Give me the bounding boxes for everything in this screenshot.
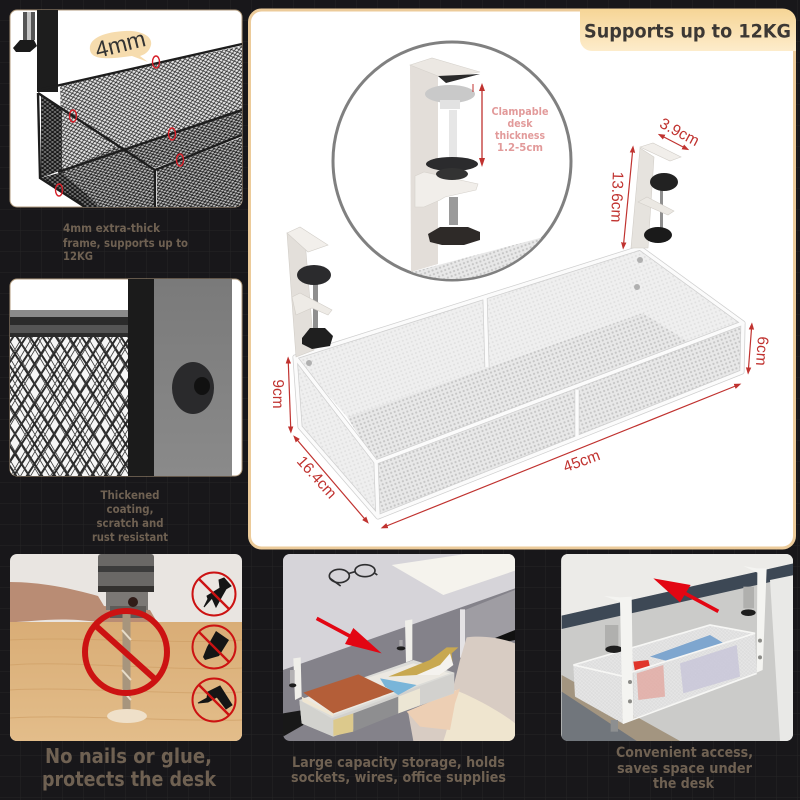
label: clampable desk thickness: thickness xyxy=(495,129,545,142)
caption: storage xyxy=(291,755,506,786)
notebook xyxy=(302,697,333,717)
caption: access: Convenient access, xyxy=(616,745,753,761)
dimension: 13.6cm: 13.6cm xyxy=(607,171,626,223)
callout: 4mm bubble: 4mm xyxy=(92,25,148,63)
dimension: 45cm xyxy=(384,385,738,527)
panel: 4mm frame photo xyxy=(10,10,242,207)
caption: access: the desk xyxy=(653,776,714,792)
dimension: 45cm: 45cm xyxy=(561,447,603,476)
gold bird ornament xyxy=(388,647,458,677)
caption: no nails: No nails or glue, xyxy=(45,744,212,768)
panel: coating close-up photo xyxy=(10,279,242,476)
panel: main product with dimensions xyxy=(250,10,794,548)
caption: 4mm frame: 4mm extra-thick xyxy=(63,221,160,235)
icon: no pushpin xyxy=(192,572,236,616)
dimension: 16.4cm xyxy=(293,438,366,521)
caption: coating xyxy=(92,488,168,544)
dimension: 3.9cm: 3.9cm xyxy=(657,115,702,150)
panel: desk access photo xyxy=(561,553,794,741)
caption: coating: scratch and xyxy=(96,516,164,530)
seated person xyxy=(408,637,515,741)
caption: 4mm frame: 12KG xyxy=(63,249,93,263)
panel: storage in use photo xyxy=(283,553,515,741)
caption: 4mm frame xyxy=(63,221,188,263)
clamps xyxy=(605,625,618,648)
caption: no nails: protects the desk xyxy=(42,767,217,791)
caption: coating: coating, xyxy=(106,502,154,516)
caption: storage: sockets, wires, office supplies xyxy=(291,770,506,786)
caption: no nails xyxy=(42,744,217,791)
label: clampable desk thickness: desk xyxy=(508,117,533,130)
icon: screw xyxy=(172,362,214,414)
product: left clamp xyxy=(287,227,333,357)
badge: load capacity xyxy=(580,9,796,51)
glasses xyxy=(329,565,377,586)
arrow: red pointer xyxy=(316,616,350,638)
dimension: 13.6cm xyxy=(607,149,633,246)
panel: no drilling photo xyxy=(10,554,242,741)
dimension: 16.4cm: 16.4cm xyxy=(293,453,340,502)
paper on desk xyxy=(392,553,515,595)
basket xyxy=(299,660,454,737)
caption: storage: Large capacity storage, holds xyxy=(292,755,505,771)
caption: access xyxy=(616,745,753,792)
dimension: 9cm: 9cm xyxy=(269,379,286,409)
inset: clamp detail circle xyxy=(333,42,580,290)
caption: coating: Thickened xyxy=(100,488,160,502)
basket xyxy=(573,625,753,676)
caption: 4mm frame: frame, supports up to xyxy=(63,236,188,250)
label: clampable desk thickness: 1.2-5cm xyxy=(497,141,543,154)
label: clampable desk thickness: Clampable xyxy=(492,105,548,118)
product: right clamp xyxy=(631,143,681,248)
clampable thickness arrow xyxy=(473,83,485,167)
icon: no glue tube xyxy=(192,626,236,668)
arrow: red pointer xyxy=(682,592,718,611)
dimension: 6cm xyxy=(748,326,771,371)
red thickness markers xyxy=(56,56,184,196)
icon: large no-drilling symbol xyxy=(85,611,167,693)
dimension: 9cm xyxy=(269,360,291,430)
clamps xyxy=(293,657,302,700)
product: mesh basket xyxy=(295,248,743,517)
icon: no power drill xyxy=(192,678,236,722)
dimension: 6cm: 6cm xyxy=(752,336,771,366)
label: clampable desk thickness xyxy=(492,105,548,154)
caption: access: saves space under xyxy=(617,761,753,777)
caption: coating: rust resistant xyxy=(92,530,168,544)
